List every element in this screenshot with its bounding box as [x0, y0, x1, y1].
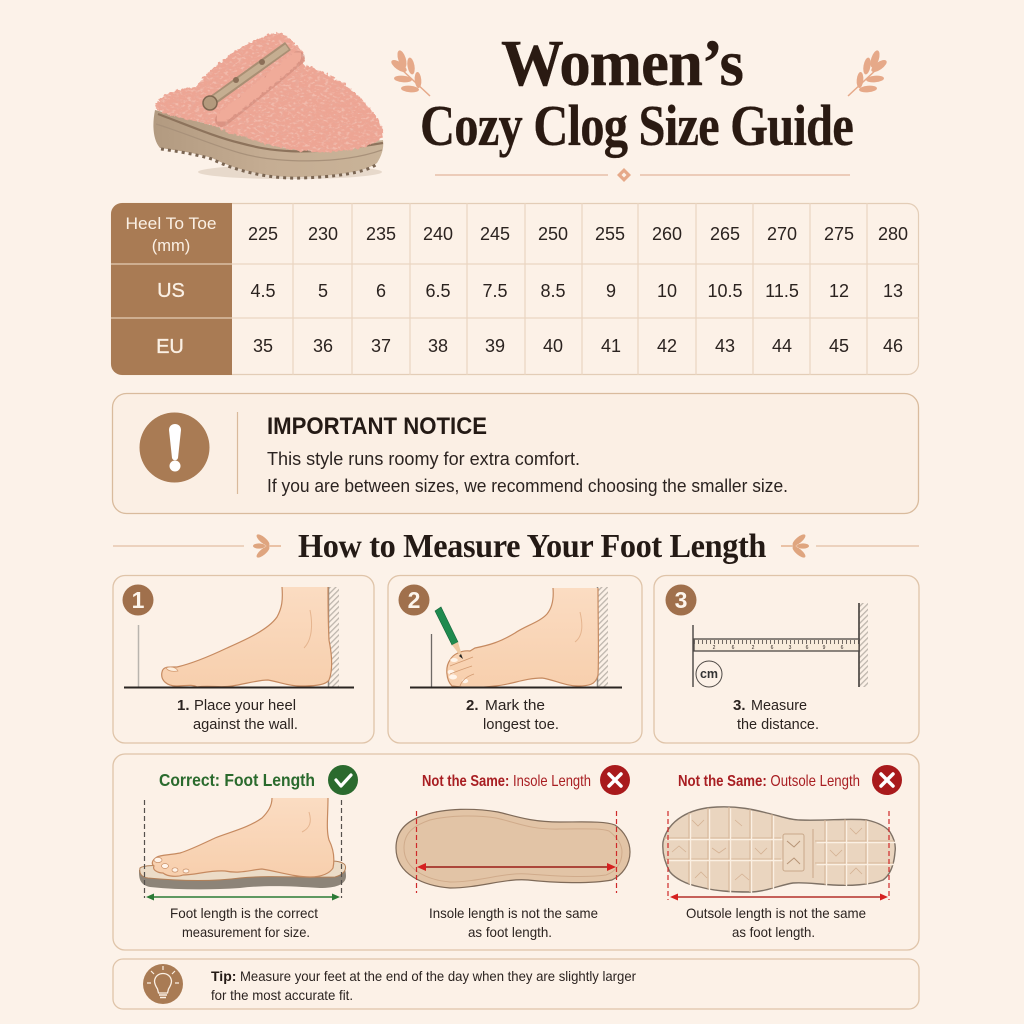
row: heel to toe values: 230	[308, 224, 338, 244]
caption: Insole length is not the same	[429, 905, 598, 921]
icon: exclamation	[140, 412, 210, 482]
caption: as foot length.	[468, 924, 552, 940]
row: EU values: 40	[543, 336, 563, 356]
icon: check	[328, 765, 358, 795]
caption	[733, 697, 819, 733]
row: heel to toe values: 280	[878, 224, 908, 244]
foot on sole	[139, 798, 346, 889]
row: EU values	[253, 336, 903, 356]
step number 1: 1	[132, 587, 145, 613]
title divider with diamond	[435, 168, 850, 182]
icon: light bulb	[143, 964, 183, 1004]
ruler	[694, 639, 859, 651]
row: EU values: 38	[428, 336, 448, 356]
icon: fuzzy pink clog	[153, 32, 383, 179]
row: US values: 4.5	[250, 281, 276, 301]
caption	[686, 905, 866, 940]
mark line	[138, 625, 140, 687]
ruler: 6	[732, 645, 735, 651]
notice body: If you are between sizes, we recommend choosing the smaller size.	[267, 476, 788, 496]
row: US values: 6	[376, 281, 386, 301]
caption: against the wall.	[193, 716, 298, 733]
wall	[859, 603, 868, 687]
arrow	[146, 894, 340, 900]
row: heel to toe values: 260	[652, 224, 682, 244]
section heading: how to measure	[113, 528, 919, 565]
row: heel to toe values: 235	[366, 224, 396, 244]
icon: left leaf sprig	[389, 49, 430, 96]
row label: heel to toe: (mm)	[152, 237, 190, 255]
row label: US: US	[157, 280, 185, 302]
row: EU values: 41	[601, 336, 621, 356]
caption	[429, 905, 598, 940]
caption: Measure	[751, 697, 807, 714]
ruler: 2	[752, 645, 755, 651]
ruler: 3	[789, 645, 792, 651]
icon: cross	[600, 765, 630, 795]
title: Women’s	[501, 27, 743, 100]
notice body	[267, 449, 788, 496]
row: US values: 10.5	[707, 281, 743, 301]
icon: right leaf sprig	[848, 49, 889, 96]
ruler: 9	[823, 645, 826, 651]
wall	[328, 587, 339, 687]
caption: 2.	[466, 697, 479, 714]
ruler: 6	[841, 645, 844, 651]
panel: step 2	[388, 576, 642, 743]
notice heading: IMPORTANT NOTICE	[267, 413, 487, 440]
measure guides	[668, 811, 889, 900]
title: Cozy Clog Size Guide	[420, 93, 853, 158]
row: US values: 8.5	[540, 281, 566, 301]
measure guides	[144, 800, 342, 898]
step number 3: 3	[675, 587, 687, 613]
ruler: 6	[806, 645, 809, 651]
step number 3	[666, 584, 696, 616]
caption	[177, 697, 298, 733]
row: EU values: 46	[883, 336, 903, 356]
section heading: how to measure: How to Measure Your Foot Length	[298, 528, 766, 565]
caption: measurement for size.	[182, 924, 310, 940]
step number 2: 2	[408, 587, 420, 613]
row: EU values: 42	[657, 336, 677, 356]
heading: Not the Same: Outsole Length	[678, 773, 860, 790]
row: US values	[250, 281, 903, 301]
caption: as foot length.	[732, 924, 815, 940]
row label: heel to toe	[126, 215, 216, 255]
heading: Not the Same: Insole Length	[422, 773, 591, 790]
row label: heel to toe: Heel To Toe	[126, 215, 216, 233]
caption: longest toe.	[483, 716, 559, 733]
comparison: correct foot length	[139, 765, 358, 940]
outsole	[662, 806, 896, 893]
ruler: 2	[713, 645, 716, 651]
comparison: insole length	[396, 765, 630, 940]
icon: cross	[872, 765, 902, 795]
row: heel to toe values: 275	[824, 224, 854, 244]
arrow	[670, 894, 888, 900]
caption: Mark the	[485, 697, 545, 714]
row: EU values: 35	[253, 336, 273, 356]
row: EU values: 36	[313, 336, 333, 356]
title	[420, 27, 853, 158]
row: heel to toe values: 225	[248, 224, 278, 244]
comparison: outsole length	[660, 765, 902, 940]
tip text: Tip:	[211, 968, 236, 984]
ground line	[410, 686, 622, 688]
row: US values: 12	[829, 281, 849, 301]
cm badge: cm	[700, 667, 718, 681]
row: heel to toe values: 255	[595, 224, 625, 244]
caption: the distance.	[737, 716, 819, 733]
ground line	[124, 686, 354, 688]
foot illustration	[162, 587, 332, 687]
row: EU values: 44	[772, 336, 792, 356]
row: heel to toe values: 270	[767, 224, 797, 244]
row: EU values: 39	[485, 336, 505, 356]
caption: 3.	[733, 697, 746, 714]
row: heel to toe values: 240	[423, 224, 453, 244]
row: US values: 9	[606, 281, 616, 301]
tip text: Measure your feet at the end of the day when they are slightly larger	[240, 968, 636, 984]
row: heel to toe values	[248, 224, 908, 244]
cm badge	[696, 661, 722, 687]
arrow	[417, 863, 616, 871]
icon: green pencil	[435, 607, 463, 659]
panel: length comparison	[113, 754, 919, 950]
icon: left sprig	[253, 533, 281, 559]
panel: step 3	[654, 576, 919, 743]
heading: Correct: Foot Length	[159, 770, 315, 790]
row: US values: 10	[657, 281, 677, 301]
row: US values: 11.5	[765, 281, 799, 301]
row: US values: 5	[318, 281, 328, 301]
panel: important notice	[112, 394, 918, 514]
step number 1	[122, 584, 154, 616]
step number 2	[398, 584, 430, 616]
insole	[396, 809, 630, 888]
tip text	[211, 968, 636, 1003]
row: heel to toe values: 265	[710, 224, 740, 244]
row: US values: 6.5	[425, 281, 451, 301]
caption: Place your heel	[194, 697, 296, 714]
wall	[598, 587, 608, 687]
foot illustration	[447, 588, 598, 688]
left stop line	[692, 625, 694, 687]
row: US values: 7.5	[482, 281, 508, 301]
row label: EU: EU	[156, 336, 184, 358]
ruler: 6	[771, 645, 774, 651]
caption	[170, 905, 318, 940]
caption: Foot length is the correct	[170, 905, 318, 921]
caption	[466, 697, 559, 733]
row: US values: 13	[883, 281, 903, 301]
panel: step 1	[113, 576, 374, 743]
mark line	[430, 634, 432, 687]
tip text: for the most accurate fit.	[211, 987, 353, 1003]
notice body: This style runs roomy for extra comfort.	[267, 449, 580, 469]
caption: 1.	[177, 697, 190, 714]
row: heel to toe values: 245	[480, 224, 510, 244]
caption: Outsole length is not the same	[686, 905, 866, 921]
row: EU values: 45	[829, 336, 849, 356]
row: EU values: 37	[371, 336, 391, 356]
size table	[111, 203, 919, 375]
row: heel to toe values: 250	[538, 224, 568, 244]
icon: right sprig	[781, 533, 809, 559]
panel: tip	[113, 959, 919, 1009]
row: EU values: 43	[715, 336, 735, 356]
measure guides	[416, 811, 616, 893]
